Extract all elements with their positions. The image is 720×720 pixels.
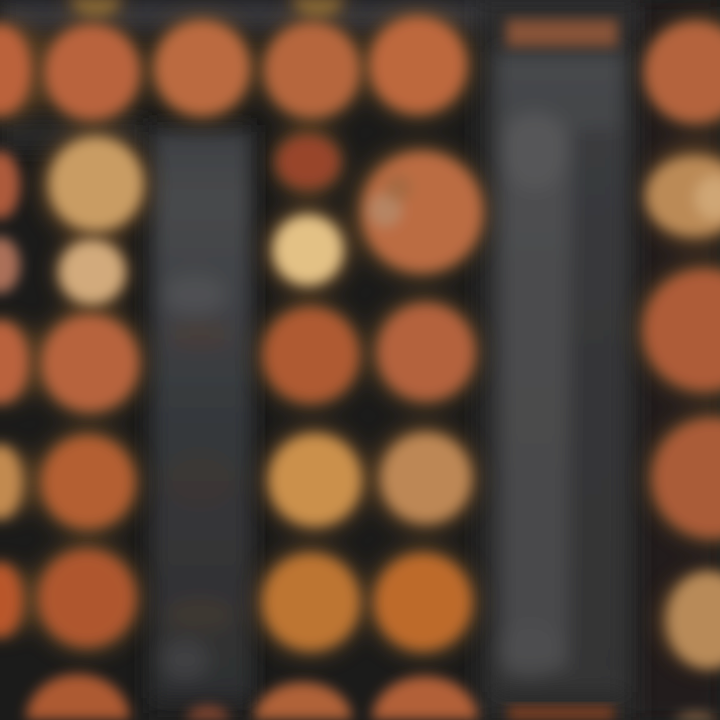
discs: third row [0,270,720,411]
column: left slate panel [154,132,250,698]
discs: cream row [0,215,343,304]
discs: bottom row [26,674,720,720]
bar: bottom orange label [508,706,614,720]
band: dark column surrounds [146,0,638,720]
discs: fifth row [0,550,720,668]
bar: top orange label [506,19,618,47]
column: right slate panel [496,52,624,692]
discs: fourth row [0,419,720,537]
discs: top row [0,0,720,122]
discs: second row [0,136,720,272]
